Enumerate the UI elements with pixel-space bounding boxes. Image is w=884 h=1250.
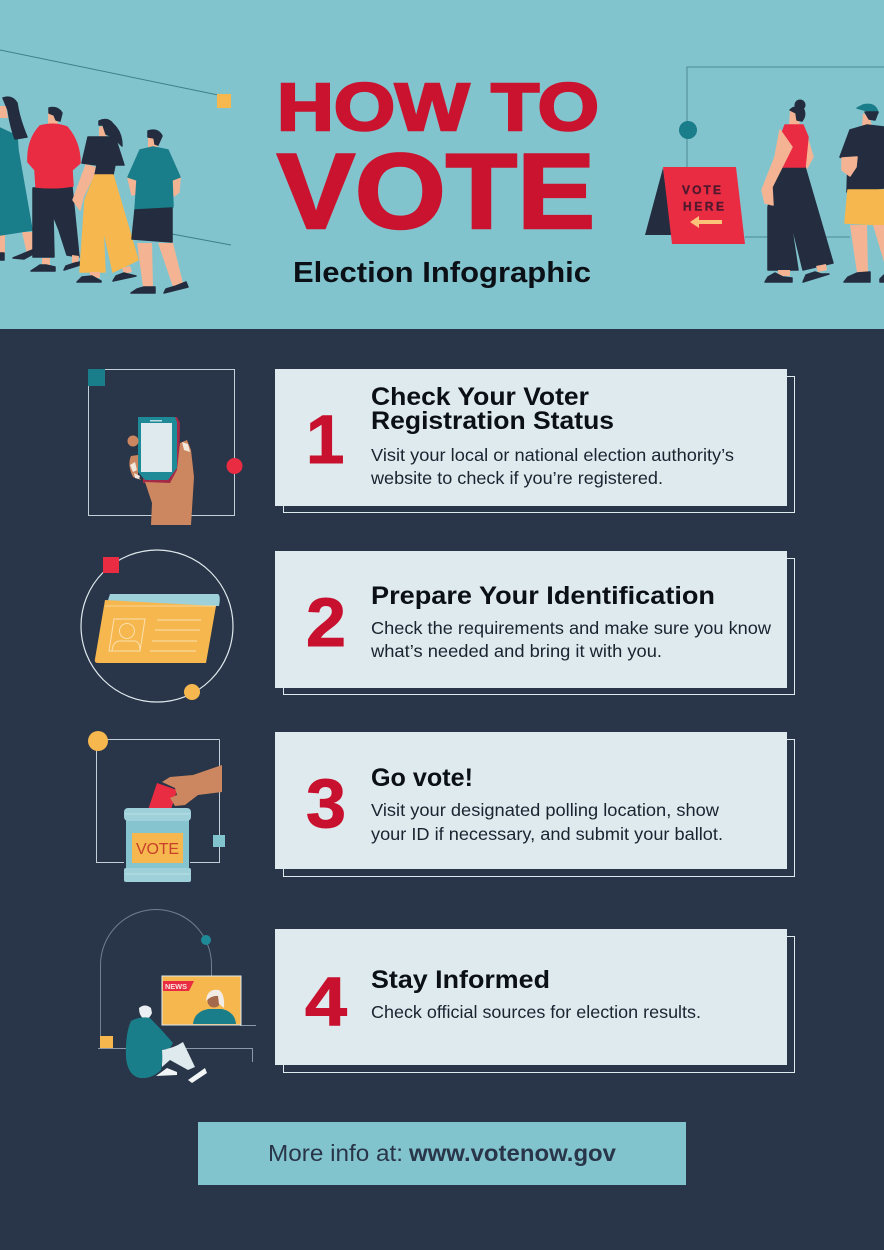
panel: step 1: Registration Status [371,407,614,435]
panel: step 3: Go vote! [371,764,473,792]
footer: more info [198,1122,686,1185]
panel: step 4: Check official sources for election results. [371,1002,701,1022]
title: how to vote [277,70,599,251]
icon: watching news [98,910,256,1083]
person: cap and shorts [840,104,884,282]
panel: step 2: 2 [306,584,346,661]
panel: step 2: Check the requirements and make sure you know [371,618,771,638]
panel: step 1: website to check if you’re registered. [370,468,663,488]
person: teal dress [0,97,35,260]
vote here sign: VOTE [682,183,721,197]
illustration: voters queue left [0,50,231,293]
panel: step 2: what’s needed and bring it with you. [370,641,662,661]
panel: step 4 [275,929,794,1072]
panel: step 2: Prepare Your Identification [371,582,715,610]
person: yellow trousers [73,120,138,282]
person: red top [762,100,833,282]
panel: step 1: 1 [306,401,344,478]
icon: id card [81,550,233,702]
panel: step 3: your ID if necessary, and submit your ballot. [371,824,723,844]
subtitle: Election Infographic [293,257,591,289]
title: how to vote: VOTE [277,131,595,251]
panel: step 4: Stay Informed [371,966,550,994]
panel: step 3: Visit your designated polling location, show [371,800,719,820]
icon: phone in hand [88,369,242,525]
illustration: voters queue right [645,67,884,282]
vote here sign: HERE [683,200,724,214]
panel: step 3 [275,732,794,876]
person: teal tee [128,130,188,293]
title: how to vote: HOW TO [277,70,599,145]
icon: ballot box [88,731,225,882]
header banner [0,0,884,329]
icon: ballot box: VOTE [136,841,179,858]
icon: watching news: NEWS [165,984,187,991]
person: red sweater [28,108,80,271]
footer: more info: www.votenow.gov [408,1140,616,1166]
vote here sign [645,167,745,244]
panel: step 2 [275,551,794,694]
panel: step 1: Check Your Voter [371,383,589,411]
panel: step 3: 3 [306,765,346,842]
panel: step 1: Visit your local or national election authority’s [371,445,734,465]
panel: step 1 [275,369,794,512]
panel: step 4: 4 [305,963,347,1040]
footer: more info: More info at: [268,1140,403,1166]
